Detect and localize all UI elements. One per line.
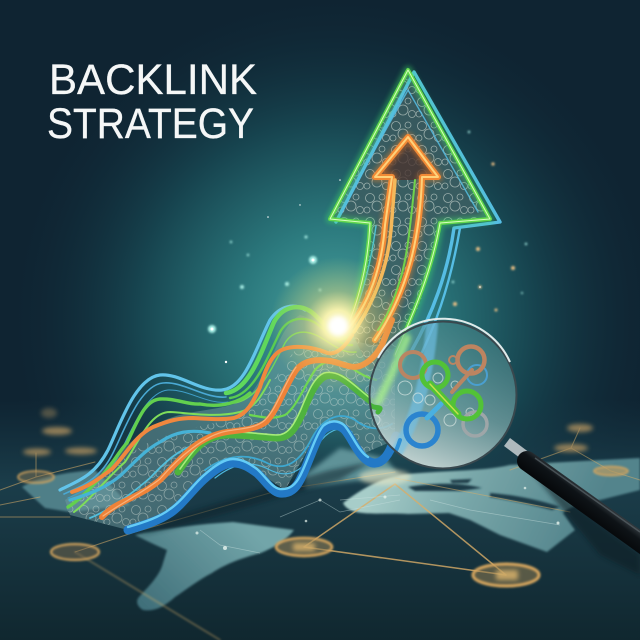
green top strands (226, 307, 345, 393)
arrow body fill (330, 70, 490, 370)
map bright points (196, 487, 560, 550)
thin blue top strands (60, 306, 305, 490)
inland seas (408, 479, 560, 510)
continent: east (343, 458, 640, 552)
arrow chain texture (330, 70, 490, 370)
centre green line (378, 180, 415, 330)
blue mid strands (70, 431, 210, 500)
blue ring upper right (467, 365, 487, 385)
scattered stars (208, 131, 527, 363)
continent: south (135, 522, 294, 610)
faint chain links (370, 373, 474, 426)
metal collar (507, 442, 527, 457)
grey ring (463, 412, 487, 436)
magnifying glass (370, 319, 640, 575)
orange strand 1 (72, 335, 352, 492)
arrow green outline (330, 70, 490, 355)
lower green strand (250, 362, 376, 418)
wave ribbon chart (60, 306, 396, 530)
continent: centre strip (305, 448, 400, 488)
arrow blue back outline (336, 72, 500, 352)
map shadow under waves (140, 462, 370, 535)
green links (422, 362, 448, 388)
ribbon chain texture (65, 345, 395, 530)
title: STRATEGY (47, 100, 254, 148)
title: BACKLINK (49, 56, 257, 104)
title (47, 56, 257, 148)
handle highlight (535, 458, 640, 532)
lens contents (370, 325, 487, 459)
rising arrow (330, 70, 500, 370)
thick blue strand (128, 425, 396, 530)
continent: left (22, 470, 130, 512)
orange inner arrow (345, 137, 438, 340)
thin light routes (200, 495, 560, 553)
ribbon translucent fill (65, 315, 395, 530)
lens rim (370, 322, 516, 468)
copper rings (400, 352, 426, 378)
handle shadow (530, 470, 640, 575)
lens highlight (378, 319, 510, 362)
orange strand 2 (102, 320, 392, 517)
lens glass (370, 322, 516, 468)
blue ring (406, 414, 438, 446)
map nodes (18, 408, 628, 586)
world map floor (0, 408, 640, 640)
light flare (270, 257, 406, 393)
network lines (0, 428, 640, 640)
black handle (527, 461, 640, 549)
